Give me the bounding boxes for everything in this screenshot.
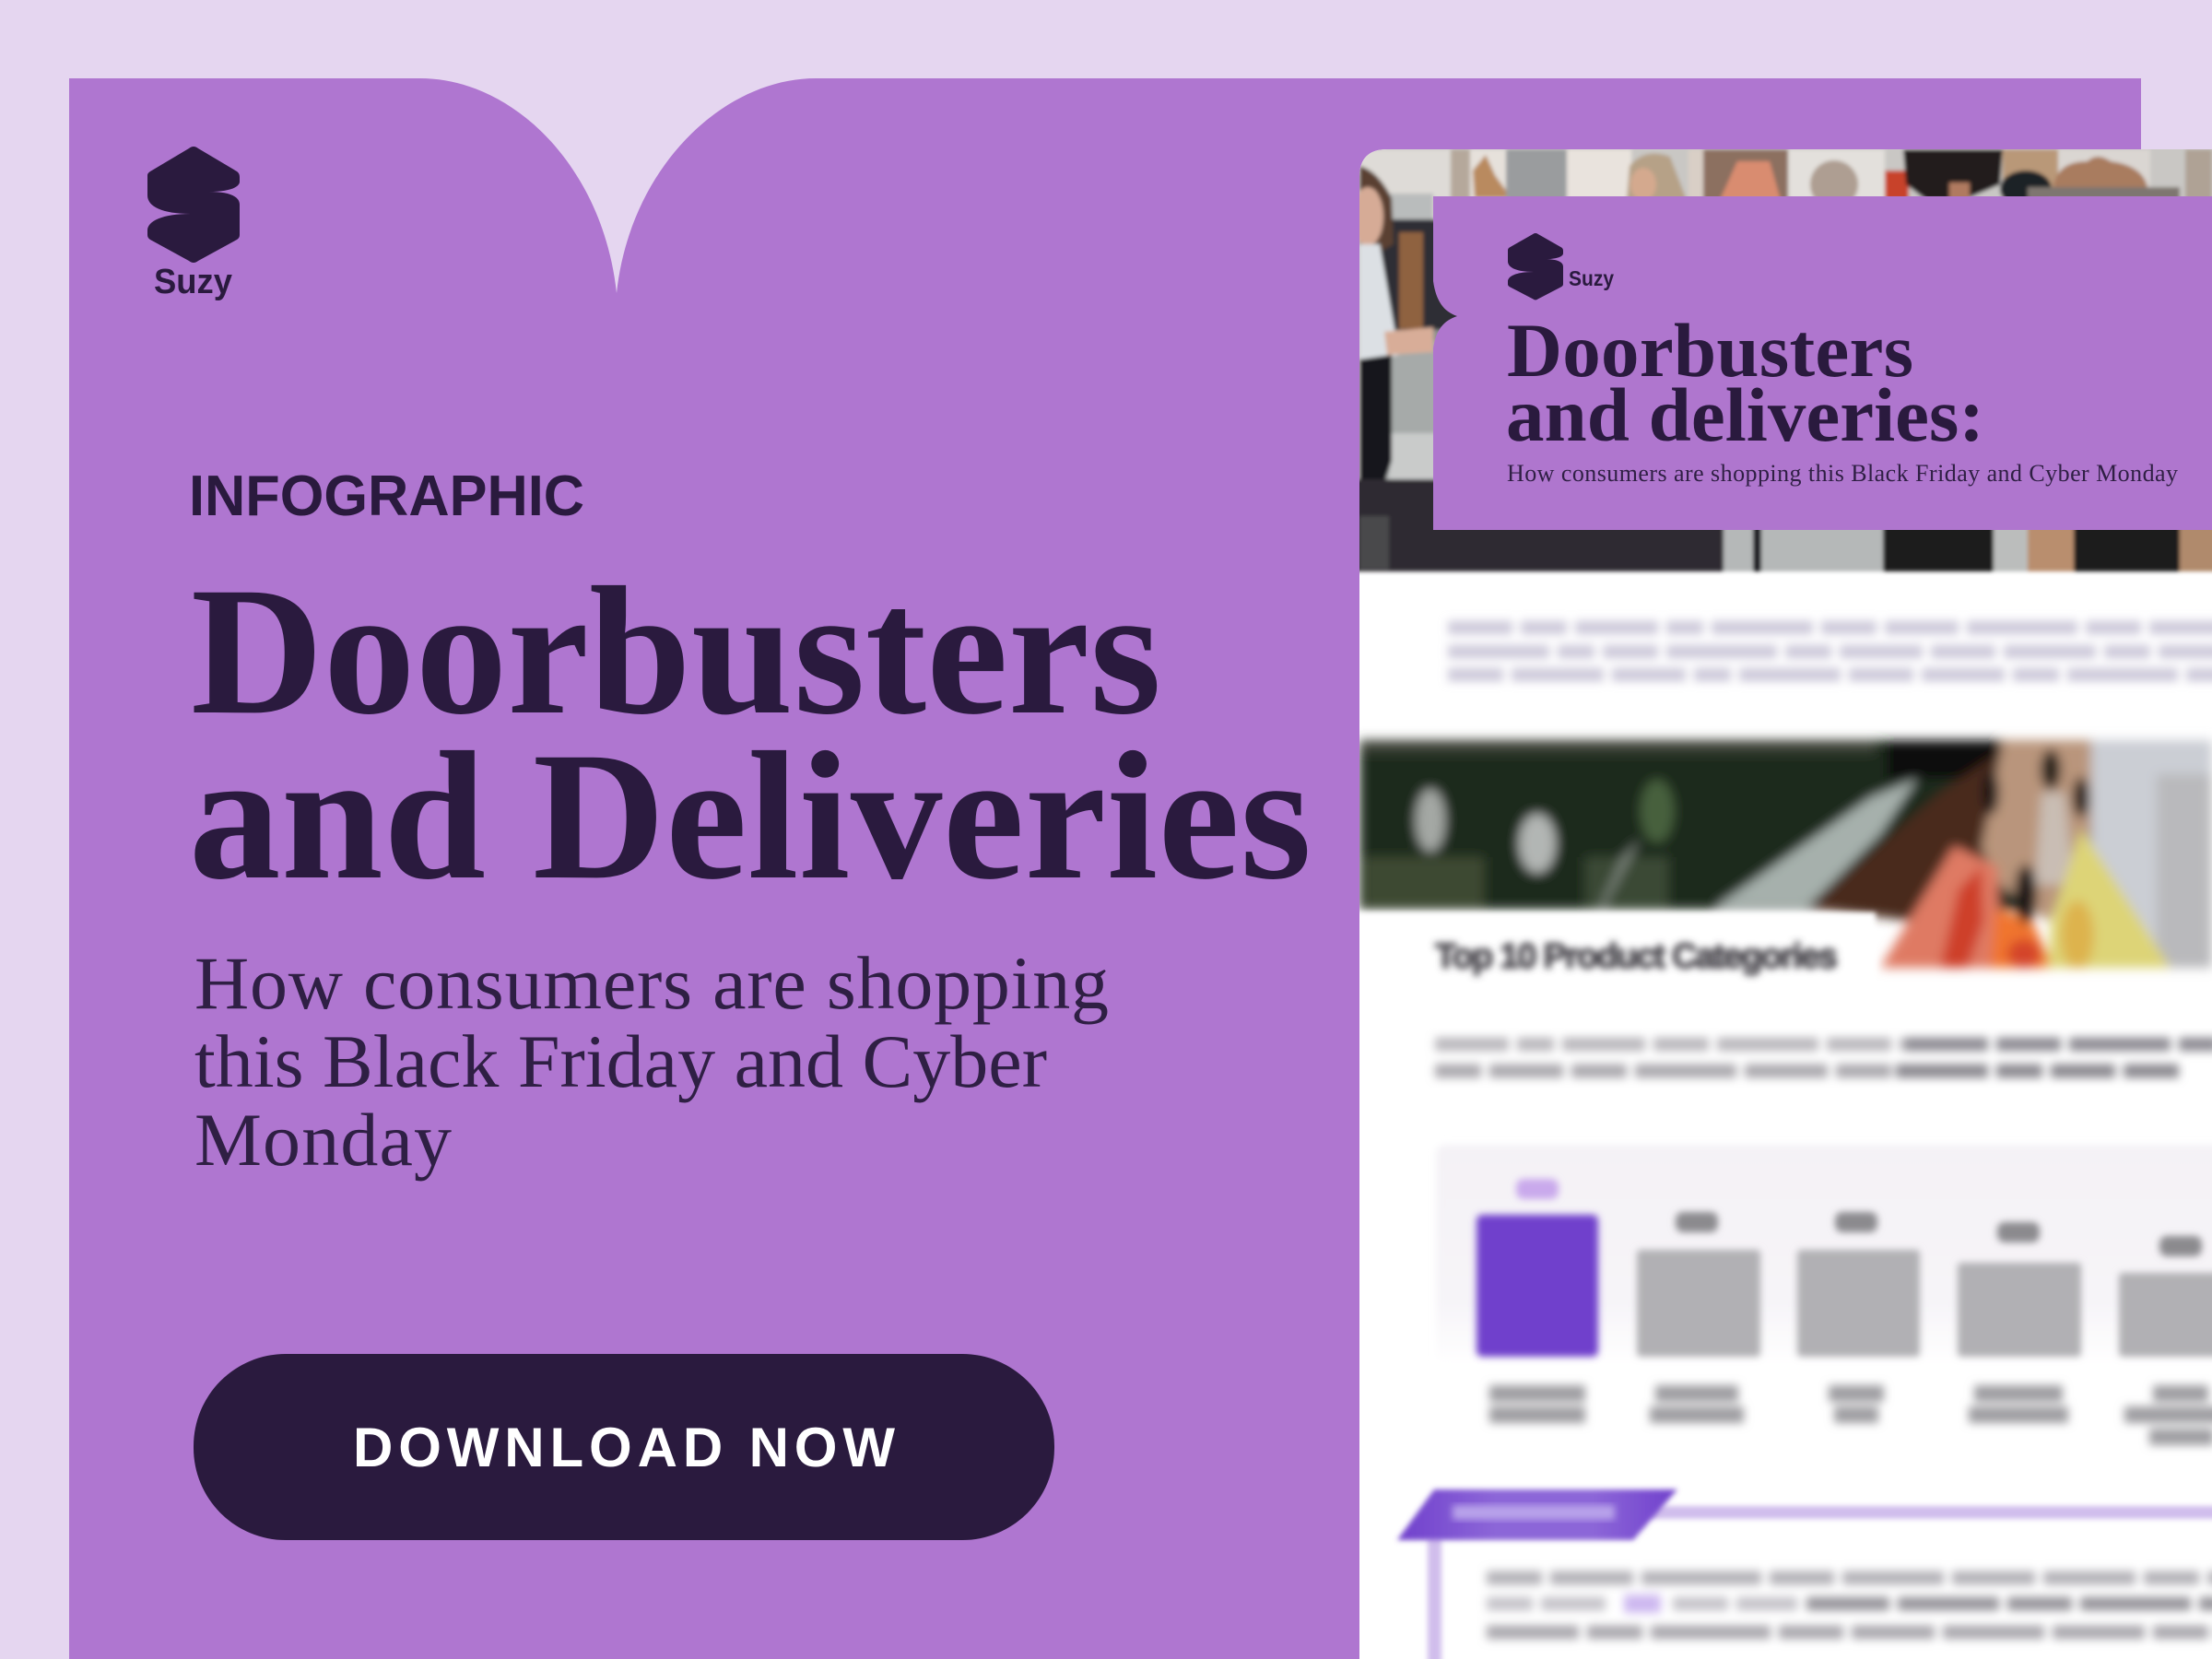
header block: preview title xyxy=(1433,196,2212,530)
tag xyxy=(1397,1489,1677,1540)
blurred intro paragraph xyxy=(1448,628,2212,675)
callout: tag and connector rules xyxy=(1397,1489,2212,1659)
preview heading: and deliveries: xyxy=(1506,372,1984,457)
photo: shopping bags xyxy=(1359,740,2212,971)
chart panel background xyxy=(1438,1147,2212,1316)
subtitle: Monday xyxy=(194,1098,452,1182)
section heading: top 10 product categories: Top 10 Product Categories xyxy=(1435,937,1838,976)
logo: Suzy xyxy=(147,147,240,301)
bars: grey categories xyxy=(1637,1250,2212,1357)
preview heading xyxy=(1508,323,1978,441)
bar: highlighted first category xyxy=(1477,1179,1598,1357)
bar chart: top categories xyxy=(1477,1179,2212,1445)
button: download now xyxy=(194,1354,1054,1540)
category labels xyxy=(1489,1385,2212,1445)
bar value labels xyxy=(1676,1212,2202,1256)
small logo xyxy=(1508,233,1614,300)
subtitle xyxy=(194,941,1109,1182)
panel: infographic preview card xyxy=(1350,146,2212,1659)
logo: Suzy: Suzy xyxy=(154,263,232,301)
heading: Doorbusters xyxy=(191,550,1161,753)
subtitle: How consumers are shopping xyxy=(194,941,1109,1025)
heading: and Deliveries xyxy=(189,715,1312,918)
connector lines xyxy=(1428,1506,2212,1659)
preview subtitle: How consumers are shopping this Black Friday and Cyber Monday xyxy=(1507,460,2178,487)
blurred callout text xyxy=(1487,1578,2212,1632)
white tab under photo xyxy=(1359,908,1879,925)
preview heading: Doorbusters xyxy=(1507,308,1913,393)
subtitle: this Black Friday and Cyber xyxy=(194,1019,1047,1103)
heading xyxy=(189,550,1312,918)
tag text xyxy=(1453,1505,1615,1520)
small logo: Suzy xyxy=(1569,266,1614,290)
eyebrow: infographic: INFOGRAPHIC xyxy=(189,465,584,528)
blurred section description xyxy=(1435,1044,2212,1071)
button: download now: DOWNLOAD NOW xyxy=(353,1417,895,1478)
photo: store scene xyxy=(1352,146,2212,571)
